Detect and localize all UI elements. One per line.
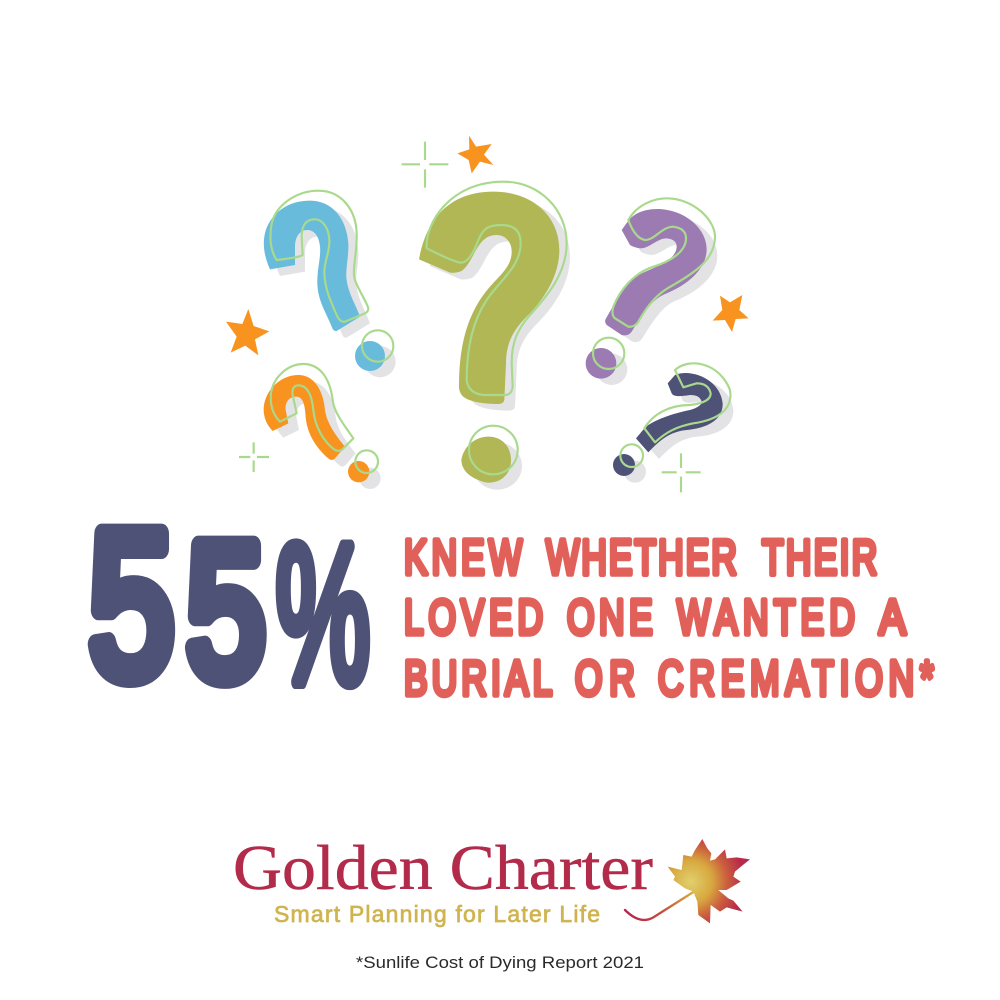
olive question mark: [419, 182, 570, 490]
line 3: BURIAL: [404, 651, 552, 706]
logo wordmark: Golden Charter: [233, 832, 653, 903]
logo tagline: Smart Planning for Later Life: [274, 901, 600, 927]
source footnote: *Sunlife Cost of Dying Report 2021: [356, 954, 644, 972]
line 1: THEIR: [762, 530, 877, 585]
line 2: LOVED: [404, 590, 543, 645]
logo: Golden Charter: [233, 832, 750, 927]
right group: olive, purple and navy question marks, stars: [402, 136, 749, 492]
line 3: OR: [575, 651, 635, 706]
line 2: [404, 590, 906, 645]
icon: orange star left: [226, 309, 269, 355]
icon: sparkle lower left: [239, 442, 269, 472]
line 1: [404, 530, 877, 585]
line 1: KNEW: [404, 530, 523, 585]
icon: orange star right: [713, 295, 749, 332]
line 3: [404, 651, 934, 706]
line 3: CREMATION*: [658, 651, 934, 706]
line 2: WANTED: [677, 590, 855, 645]
purple question mark: [586, 198, 717, 385]
big statistic: 55%: %: [276, 504, 370, 724]
icon: sparkle top: [402, 142, 448, 188]
big statistic: 55%: 5: [187, 504, 265, 718]
line 2: A: [879, 590, 906, 645]
question mark cluster: [226, 136, 749, 492]
statement text: [404, 530, 934, 706]
blue question mark: [264, 191, 396, 377]
icon: maple leaf: [625, 839, 750, 923]
navy question mark: [613, 363, 733, 483]
left group: blue and orange question marks, stars: [226, 191, 396, 489]
icon: orange star top: [457, 136, 493, 173]
line 2: ONE: [567, 590, 653, 645]
big statistic: 55%: 5: [89, 488, 174, 720]
orange question mark: [264, 364, 381, 489]
big statistic: 55%: [89, 488, 370, 724]
icon: sparkle lower right: [662, 453, 701, 492]
line 1: WHETHER: [546, 530, 737, 585]
